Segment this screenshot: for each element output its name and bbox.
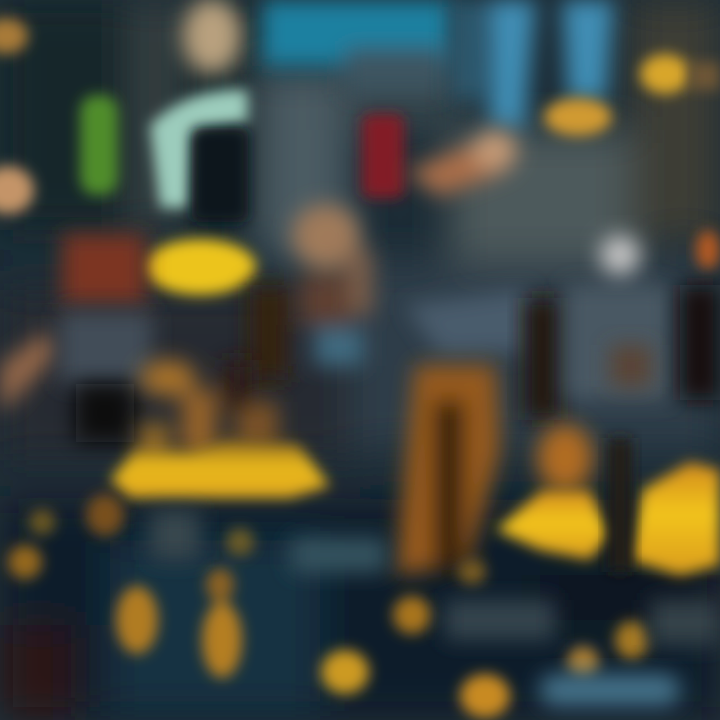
red panel <box>362 114 404 198</box>
light blue foreground <box>540 674 680 706</box>
far right orange spot <box>696 230 720 270</box>
yellow flame right <box>496 490 610 560</box>
orange red block <box>62 234 146 304</box>
foreground grey blocks <box>150 510 720 645</box>
green column <box>80 95 118 195</box>
top right orange stripe <box>690 62 720 90</box>
right grey figure <box>565 285 670 400</box>
left arm <box>0 332 60 410</box>
grey jacket <box>405 288 530 355</box>
left grey jacket <box>60 312 152 384</box>
yellow shoe <box>544 98 612 136</box>
yellow flame left <box>110 440 330 498</box>
gold ornaments <box>140 360 278 462</box>
left orange lights <box>0 18 34 214</box>
yellow flame far right <box>630 462 720 576</box>
figure: head <box>182 0 242 74</box>
blue trousers <box>452 0 614 130</box>
background <box>0 84 552 272</box>
figure: pale shirt <box>150 90 248 208</box>
orange flame right <box>537 424 593 492</box>
dark divider post <box>608 438 632 572</box>
central figure <box>250 204 373 380</box>
small gold pieces <box>8 494 649 718</box>
top right yellow lamp <box>640 54 690 94</box>
dark torso right <box>525 298 561 420</box>
orange legs <box>395 365 500 575</box>
central blue bar <box>290 537 388 573</box>
sky <box>262 0 452 94</box>
standing figure <box>150 0 248 222</box>
left black shape <box>76 384 134 442</box>
far right dark shape <box>680 285 720 400</box>
right orange limb <box>610 345 652 387</box>
yellow block <box>144 239 256 295</box>
white spot <box>600 235 640 275</box>
outstretched arm <box>406 130 520 196</box>
figure: dark vest <box>192 128 248 222</box>
